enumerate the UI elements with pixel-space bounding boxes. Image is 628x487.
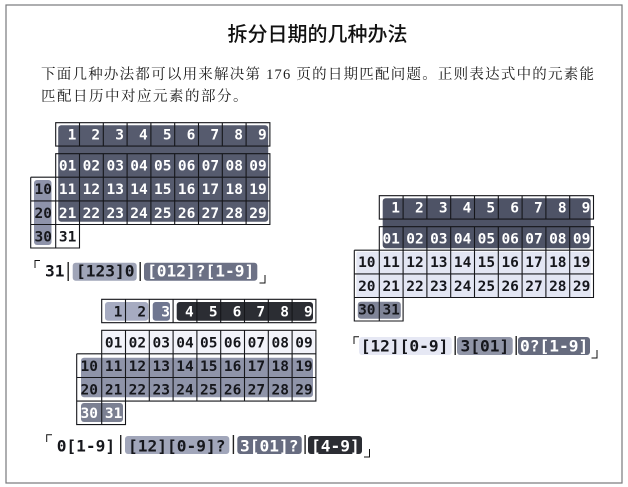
day numbers (382, 201, 590, 248)
calendar 3: bottom: 3 (161, 304, 170, 320)
day numbers: 23 (152, 382, 170, 398)
grid lines (31, 123, 270, 248)
day numbers: 04 (130, 159, 148, 175)
day numbers: 6 (187, 128, 195, 144)
grid lines (354, 196, 594, 321)
highlight: 10-29 (356, 252, 591, 298)
day numbers: 4 (463, 201, 472, 217)
highlight: 10 20 30 (34, 180, 52, 245)
regex 2: 0?[1-9] (520, 336, 588, 356)
day numbers: 29 (249, 206, 267, 222)
calendar 1: top left: 10 (34, 182, 52, 198)
day numbers: 16 (224, 359, 241, 375)
calendar 3: bottom: 5 (209, 304, 218, 320)
day numbers: 06 (224, 335, 241, 351)
day numbers: 18 (271, 359, 289, 375)
day numbers: 4 (139, 128, 148, 144)
day numbers: 19 (249, 182, 267, 198)
day numbers: 28 (271, 382, 289, 398)
calendar 3: bottom (77, 299, 316, 425)
day numbers: 08 (225, 159, 243, 175)
title: 拆分日期的几种办法 (228, 23, 408, 46)
calendar 1: top left: 30 (34, 230, 52, 246)
calendar 2: right: 26 (501, 279, 519, 295)
calendar 1: top left: 31 (59, 230, 77, 246)
calendar 2: right: 24 (454, 279, 472, 295)
regex 3: 0[1-9] (57, 436, 115, 456)
day numbers: 01 (105, 335, 123, 351)
day numbers: 14 (176, 359, 194, 375)
day numbers: 21 (105, 382, 123, 398)
highlight: 10-29 (81, 358, 313, 397)
day numbers: 21 (59, 206, 77, 222)
day numbers: 25 (200, 382, 218, 398)
day numbers: 10 (80, 359, 98, 375)
calendar 3: bottom: 4 (185, 304, 194, 320)
calendar 1: top left (31, 123, 270, 248)
day numbers: 11 (105, 359, 123, 375)
calendar 2: right: 22 (406, 279, 424, 295)
day numbers: 8 (234, 128, 243, 144)
regex 2 (354, 336, 597, 358)
day numbers: 18 (225, 182, 243, 198)
calendar 2: right: 25 (478, 279, 495, 295)
regex 1: [012]?[1-9] (147, 262, 254, 280)
day numbers: 13 (152, 359, 170, 375)
regex 3 (47, 435, 369, 457)
day numbers: 20 (80, 382, 98, 398)
day numbers: 07 (248, 335, 265, 351)
calendar 2: right: 12 (406, 255, 424, 271)
day numbers: 8 (558, 201, 567, 217)
calendar 1: top left: 20 (34, 206, 52, 222)
intro text: 匹配日历中对应元素的部分。 (41, 88, 249, 105)
day numbers: 3 (439, 201, 448, 217)
highlight: 30 31 (358, 302, 401, 319)
day numbers: 02 (406, 232, 424, 248)
day numbers: 07 (202, 159, 219, 175)
regex 1: [123]0 (76, 262, 134, 280)
day numbers: 26 (224, 382, 241, 398)
calendar 3: bottom: 8 (280, 304, 289, 320)
highlight: 1-9 and 01-09 (383, 198, 591, 248)
day numbers: 03 (152, 335, 170, 351)
day numbers: 02 (129, 335, 146, 351)
calendar 3: bottom: 6 (233, 304, 241, 320)
day numbers: 01 (382, 232, 400, 248)
day numbers: 9 (582, 201, 590, 217)
calendar 2: right: 23 (430, 279, 448, 295)
day numbers: 22 (83, 206, 100, 222)
day numbers: 27 (202, 206, 219, 222)
highlight: 01-09 (103, 331, 315, 353)
day numbers: 15 (154, 182, 172, 198)
highlight: 3 (153, 302, 170, 321)
calendar 2: right: 19 (573, 255, 590, 271)
day numbers: 2 (91, 128, 100, 144)
day numbers: 11 (59, 182, 77, 198)
calendar 2: right: 30 (358, 302, 376, 318)
day numbers: 06 (501, 232, 519, 248)
grid lines (77, 299, 316, 425)
day numbers: 7 (210, 128, 219, 144)
day numbers: 12 (129, 359, 146, 375)
calendar 3: bottom: 31 (105, 406, 123, 422)
day numbers: 3 (115, 128, 124, 144)
day numbers (59, 128, 267, 222)
day numbers: 1 (114, 304, 123, 320)
regex 3: [4-9] (311, 436, 360, 456)
regex 3: 3[01]? (240, 436, 298, 456)
calendar 2: right: 20 (358, 279, 376, 295)
calendar 2: right: 13 (430, 255, 448, 271)
highlight: 30 31 (81, 403, 123, 422)
day numbers: 09 (573, 232, 590, 248)
day numbers: 05 (200, 335, 218, 351)
day numbers: 08 (271, 335, 289, 351)
day numbers: 9 (258, 128, 267, 144)
day numbers: 04 (176, 335, 194, 351)
day numbers: 08 (549, 232, 567, 248)
day numbers: 29 (295, 382, 313, 398)
calendar 2: right: 31 (382, 302, 400, 318)
day numbers: 24 (176, 382, 194, 398)
day numbers: 22 (129, 382, 146, 398)
day numbers: 19 (295, 359, 313, 375)
day numbers: 27 (248, 382, 265, 398)
day numbers: 03 (106, 159, 124, 175)
calendar 2: right: 17 (525, 255, 543, 271)
calendar 2: right: 10 (358, 255, 376, 271)
regex 2: [12][0-9] (361, 336, 448, 356)
day numbers: 13 (106, 182, 124, 198)
calendar 2: right: 27 (525, 279, 543, 295)
calendar 2: right: 29 (573, 279, 590, 295)
regex 2: 3[01] (460, 336, 509, 356)
calendar 2: right: 21 (382, 279, 400, 295)
day numbers: 28 (225, 206, 243, 222)
day numbers: 1 (68, 128, 77, 144)
calendar 2: right: 16 (501, 255, 519, 271)
day numbers: 2 (137, 304, 146, 320)
day numbers: 6 (510, 201, 519, 217)
day numbers: 5 (486, 201, 495, 217)
day numbers: 05 (478, 232, 495, 248)
highlight: 1 2 (105, 302, 148, 321)
day numbers: 06 (178, 159, 195, 175)
regex 1: 31 (45, 262, 64, 280)
highlight: 4-9 (177, 302, 313, 321)
day numbers: 15 (200, 359, 218, 375)
day numbers: 05 (154, 159, 172, 175)
calendar 2: right: 11 (382, 255, 400, 271)
day numbers: 26 (178, 206, 195, 222)
day numbers: 16 (178, 182, 195, 198)
regex 3: [12][0-9]? (128, 436, 225, 456)
day numbers: 09 (295, 335, 313, 351)
calendar 2: right: 14 (454, 255, 472, 271)
regex 1 (35, 260, 265, 283)
day numbers: 23 (106, 206, 124, 222)
calendar 3: bottom: 9 (304, 304, 313, 320)
calendar 2: right: 28 (549, 279, 567, 295)
calendar 2: right: 18 (549, 255, 567, 271)
day numbers: 1 (391, 201, 400, 217)
calendar 3: bottom: 30 (80, 406, 98, 422)
calendar 2: right (354, 196, 594, 321)
day numbers: 03 (430, 232, 448, 248)
day numbers: 17 (202, 182, 219, 198)
calendar 2: right: 15 (478, 255, 495, 271)
day numbers (80, 304, 313, 398)
day numbers: 17 (248, 359, 265, 375)
day numbers: 25 (154, 206, 172, 222)
day numbers: 24 (130, 206, 148, 222)
highlight: all 1-29 (58, 125, 268, 222)
day numbers: 2 (415, 201, 424, 217)
intro text: 下面几种办法都可以用来解决第 176 页的日期匹配问题。正则表达式中的元素能 (41, 65, 594, 83)
day numbers: 7 (534, 201, 543, 217)
day numbers: 14 (130, 182, 148, 198)
day numbers: 02 (83, 159, 100, 175)
day numbers: 01 (59, 159, 77, 175)
day numbers: 07 (525, 232, 543, 248)
calendar 3: bottom: 7 (256, 304, 265, 320)
day numbers: 5 (163, 128, 172, 144)
day numbers: 09 (249, 159, 267, 175)
day numbers: 12 (83, 182, 100, 198)
day numbers: 04 (454, 232, 472, 248)
intro text (41, 65, 594, 105)
